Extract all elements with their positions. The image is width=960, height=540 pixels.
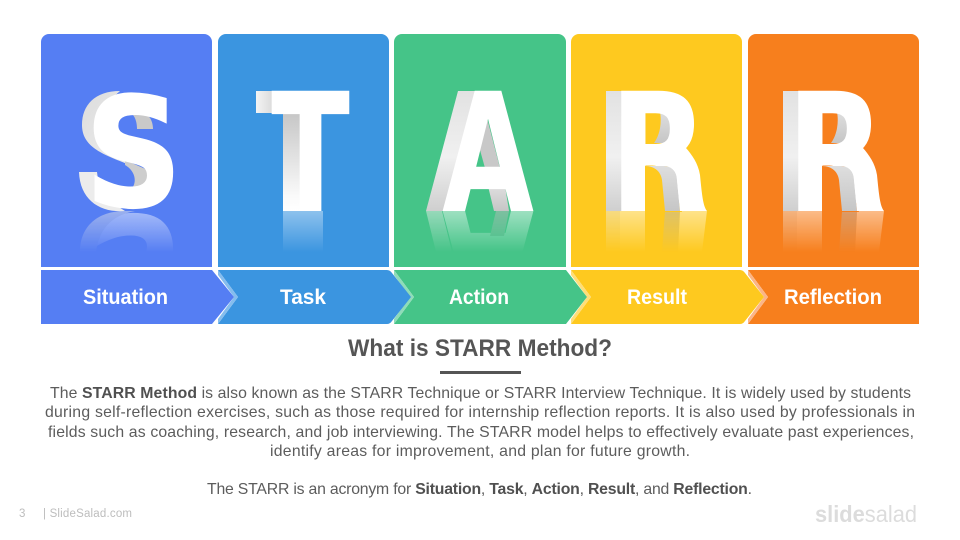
chevron: Action [394,270,587,324]
chevron: Task: Task [280,286,326,309]
card background [41,34,212,267]
letter S reflection: S [85,180,182,356]
letter R front: R [609,58,709,250]
panel: R for Reflection [748,34,919,267]
title underline [440,371,521,374]
panel: T for Task [218,34,389,267]
letter R side faces [606,91,676,211]
acronym sentence: The STARR is an acronym for Situation, Task, Action, Result, and Reflection. [207,481,752,498]
card background [571,34,742,267]
panel: A for Action [394,34,566,364]
letter R leg side [645,166,680,211]
description paragraph: identify areas for improvement, and plan for future growth. [270,443,690,460]
letter T side faces [256,91,300,211]
letter T reflection [283,211,323,252]
letter R leg front [841,148,884,211]
card background [748,34,919,267]
footer page number: 3 [19,508,25,520]
panel: S for Situation [41,34,212,356]
chevron row [41,270,919,324]
letter S side faces [79,91,153,211]
chevron: Reflection: Reflection [784,286,882,309]
description paragraph: The STARR Method is also known as the STARR Technique or STARR Interview Technique. It is widely used by students [50,385,911,402]
description paragraph: during self-reflection exercises, such as those required for internship reflection reports. It is also used by professionals in [45,404,915,421]
panel: R for Result [571,34,742,267]
chevron: Action: Action [449,286,509,309]
footer site name: | SlideSalad.com [43,508,132,520]
chevron: Situation: Situation [83,286,168,309]
description paragraph [45,385,915,460]
letter A front: A [442,58,534,250]
card background [394,34,566,267]
letter R reflection [606,211,707,252]
letter A reflection: A [442,172,534,364]
letter A reflection [426,211,534,248]
letter T front: T [271,58,350,250]
letter A side faces [426,91,509,211]
letter R reflection [783,211,884,252]
letter R front: R [786,58,886,250]
letter R leg front [664,148,707,211]
letter S front: S [85,66,182,242]
chevron: Result: Result [627,286,687,309]
letter S reflection [80,211,173,248]
chevron: Task [218,270,411,324]
letter R lower counter [645,166,682,212]
chevron: Situation [41,270,234,324]
letter R leg side [822,166,857,211]
description paragraph: fields such as coaching, research, and job interviewing. The STARR model helps to effectively evaluate past experiences, [48,424,914,441]
letter R lower counter [822,166,859,212]
card background [218,34,389,267]
title: What is STARR Method? [348,335,612,362]
chevron: Result [571,270,764,324]
letter R side faces [783,91,853,211]
footer logo: slidesalad [815,501,917,527]
chevron: Reflection [748,270,919,324]
